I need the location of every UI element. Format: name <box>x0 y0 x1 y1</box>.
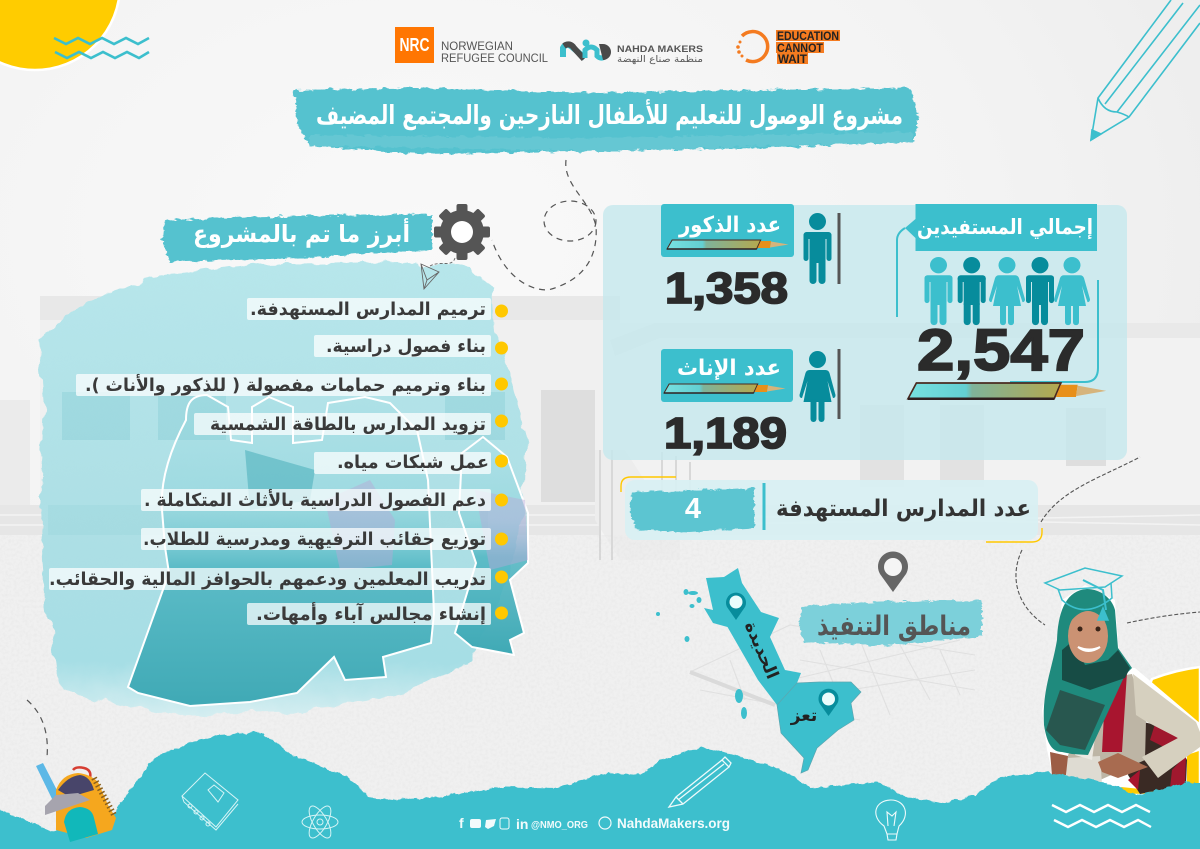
building windows showing through <box>48 392 505 535</box>
corner accents <box>621 477 1042 542</box>
icon: paper plane <box>421 258 455 289</box>
girl photo <box>1042 568 1200 794</box>
heading: achievements <box>162 214 432 262</box>
logo: NRC: NORWEGIAN <box>441 41 513 53</box>
social handles and website <box>459 815 730 832</box>
logo: Education Cannot Wait: EDUCATION <box>777 29 839 43</box>
logo: Nahda Makers: NAHDA MAKERS <box>617 44 703 55</box>
logo: Education Cannot Wait: CANNOT <box>777 41 824 55</box>
icon: light bulb <box>876 800 905 840</box>
dashed line left <box>27 700 47 757</box>
list row 1: ترميم المدارس المستهدفة. <box>250 299 486 320</box>
logo: NRC <box>395 27 549 65</box>
total label <box>905 204 1097 251</box>
partner logos <box>395 27 840 66</box>
list row 5: عمل شبكات مياه. <box>337 452 489 473</box>
region: Hodeidah <box>704 568 801 705</box>
zigzag waves top left <box>54 38 149 58</box>
heading: implementation areas: مناطق التنفيذ <box>817 611 971 642</box>
icon: pencil footer <box>669 757 731 807</box>
region: Taiz <box>777 682 861 773</box>
social icons: f <box>459 815 464 831</box>
label: عدد المدارس المستهدفة <box>776 496 1031 522</box>
list row 3: بناء وترميم حمامات مفصولة ( للذكور والأناث ). <box>85 374 486 396</box>
male label <box>661 204 794 257</box>
decorative sun top left <box>0 0 120 70</box>
dashed connector right <box>1016 457 1200 625</box>
list row 6: دعم الفصول الدراسية بالأثاث المتكاملة . <box>144 489 486 511</box>
ruler large <box>908 383 1106 399</box>
islands <box>656 589 747 719</box>
icon: atom <box>302 803 338 841</box>
white outline <box>1042 585 1200 790</box>
brush value <box>630 488 754 532</box>
logo: Education Cannot Wait <box>736 29 840 66</box>
icon: female figure <box>800 351 836 422</box>
logo: NRC: NRC <box>400 35 430 55</box>
icon: notebook <box>182 773 238 830</box>
social handles and website: in <box>516 816 528 832</box>
website: NahdaMakers.org <box>617 816 730 831</box>
handle: @NMO_ORG <box>531 819 588 831</box>
torso and skirt <box>1066 674 1146 785</box>
map of Hodeidah and Taiz <box>656 568 861 773</box>
graduation cap outline <box>1045 568 1122 620</box>
pin: Hodeidah <box>726 593 746 620</box>
people pictogram <box>924 257 1090 325</box>
girls silhouette photo <box>128 395 528 706</box>
red strap <box>1102 672 1127 752</box>
value 4: 4 <box>685 493 701 525</box>
heading: implementation areas <box>799 600 982 646</box>
female label <box>661 349 793 402</box>
panel: project achievements <box>38 262 528 716</box>
torn teal footer <box>0 732 1200 849</box>
panel: beneficiaries <box>603 204 1127 460</box>
list row 8: تدريب المعلمين ودعمهم بالحوافز المالية والحقائب. <box>49 569 486 590</box>
watercolour blob <box>38 262 526 716</box>
logo: NRC: REFUGEE COUNCIL <box>441 53 549 65</box>
list row 7: توزيع حقائب الترفيهية ومدرسية للطلاب. <box>143 529 486 550</box>
title banner <box>293 88 918 154</box>
title text: مشروع الوصول للتعليم للأطفال النازحين والمجتمع المضيف <box>316 99 903 131</box>
sleeve <box>1133 674 1200 778</box>
connector lines <box>897 228 1098 382</box>
icon: male figure <box>804 213 832 284</box>
hands <box>1098 753 1148 778</box>
zigzag waves bottom right <box>1052 805 1151 827</box>
divider <box>762 483 766 530</box>
icon: backpack <box>36 763 116 842</box>
divider male <box>838 213 840 284</box>
panel: target schools <box>621 477 1042 542</box>
list row 4: تزويد المدارس بالطاقة الشمسية <box>210 414 486 435</box>
logo: Education Cannot Wait: WAIT <box>778 52 808 66</box>
female label: عدد الإناث <box>677 356 781 381</box>
icon: location pin <box>878 552 908 592</box>
hijab <box>1044 589 1132 755</box>
male number: 1,358 <box>665 264 788 313</box>
dribbble ball <box>599 817 611 829</box>
label: Hodeidah: الحديدة <box>740 619 782 682</box>
faded school building photo <box>0 296 1200 849</box>
divider female <box>838 349 840 419</box>
logo: Nahda Makers: منظمة صناع النهضة <box>617 55 703 65</box>
female number: 1,189 <box>664 409 787 458</box>
list row 9: إنشاء مجالس آباء وأمهات. <box>256 602 486 625</box>
icon: pencil top right <box>1091 0 1200 140</box>
heading: achievements: أبرز ما تم بالمشروع <box>193 218 410 248</box>
label: Taiz: تعز <box>790 706 817 726</box>
male label: عدد الذكور <box>678 213 781 238</box>
total number: 2,547 <box>917 318 1085 383</box>
icon: gear <box>434 204 490 260</box>
pin: Taiz <box>819 689 839 716</box>
logo: Nahda Makers <box>563 40 703 65</box>
street map texture <box>690 625 975 720</box>
total label: إجمالي المستفيدين <box>917 215 1093 239</box>
decorative sun bottom right <box>1120 667 1200 795</box>
dashed flight path <box>492 160 596 290</box>
backpack <box>1128 722 1187 794</box>
face <box>1068 609 1108 663</box>
list row 2: بناء فصول دراسية. <box>326 336 486 357</box>
